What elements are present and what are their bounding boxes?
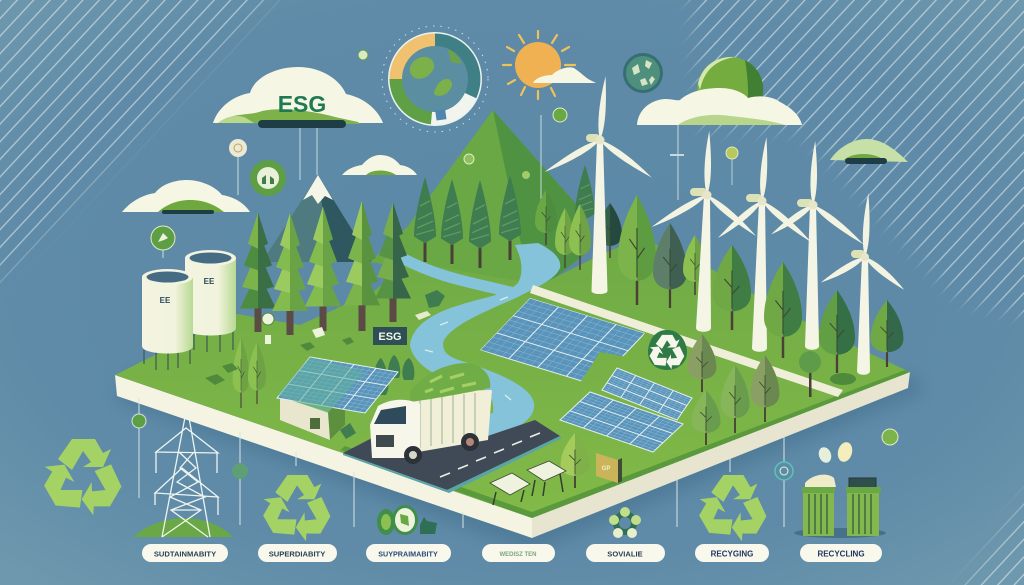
- globe infographic: [382, 26, 488, 132]
- wind turbines: [543, 76, 906, 375]
- label pill 2: [258, 544, 337, 562]
- solar field: large array: [480, 298, 645, 385]
- label pill 4: WEDISZ TEN: [500, 552, 536, 558]
- storage tank back: [185, 250, 236, 352]
- badge group: [377, 505, 437, 535]
- recycle icon right: [692, 475, 773, 546]
- turbine 2: [650, 131, 758, 332]
- turbine 4: [769, 141, 866, 350]
- round tree: [799, 351, 821, 397]
- platform side right: [532, 372, 910, 538]
- storage tank back: EE: [204, 277, 215, 286]
- turbine 5: [819, 193, 906, 375]
- small five-node recycle icon: [609, 507, 641, 538]
- sun: [503, 31, 596, 99]
- label pill 4: [482, 544, 555, 562]
- turbine 1: [543, 76, 654, 294]
- small trees and shrubs near house: [205, 290, 445, 408]
- dump body: [410, 390, 492, 452]
- solar field: front lower array: [560, 392, 683, 452]
- label pill 6: [695, 544, 769, 562]
- picnic solar tables: [490, 461, 566, 505]
- floating icons: [151, 50, 738, 258]
- recycle icon large: [36, 439, 128, 520]
- platform side left: [115, 375, 532, 538]
- house solar roof: [277, 357, 398, 413]
- label pill 3: [366, 544, 451, 562]
- green hemisphere: [697, 57, 763, 123]
- pins along the platform edge: [139, 398, 784, 528]
- label pill 3: SUYPRAIMABITY: [378, 550, 438, 558]
- gold sign: [596, 453, 622, 483]
- cloud: small middle: [342, 155, 417, 175]
- storage tank front: [142, 269, 193, 370]
- patch of dark ground: [830, 373, 856, 385]
- truck: [370, 363, 492, 464]
- river-side tiny tree: [561, 433, 589, 488]
- small solar house: [277, 357, 398, 440]
- bin left: [802, 475, 836, 536]
- bin right: [846, 478, 881, 536]
- cloud: left: [122, 180, 250, 214]
- recycle icon medium: [256, 475, 337, 546]
- mountain: green: [370, 110, 590, 290]
- label pill 5: SOVIALIE: [607, 550, 643, 558]
- ESG title: ESG: [278, 91, 326, 117]
- solar field: back lower array: [602, 368, 692, 420]
- label pill 2: SUPERDIABITY: [269, 550, 325, 558]
- grass surface: [115, 238, 910, 518]
- platform: [115, 238, 910, 538]
- turbine 3: [716, 137, 813, 352]
- tall pines on the hill: [414, 165, 595, 268]
- transmission tower: [133, 412, 233, 537]
- river: [402, 243, 560, 447]
- ESG sign: ESG: [378, 331, 402, 343]
- mountain: snow peak: [262, 175, 372, 262]
- green load: [410, 363, 490, 402]
- background trees right of river: [535, 190, 707, 308]
- pin badges: [132, 414, 898, 480]
- cloud: right: [637, 88, 802, 125]
- sun cloud: [533, 67, 596, 83]
- storage tank front: EE: [160, 296, 171, 305]
- label pill 5: [586, 544, 665, 562]
- label pill 6: RECYGING: [711, 550, 753, 558]
- left fir trees: [240, 200, 411, 335]
- ESG sign: [373, 327, 407, 345]
- small globe icon: [623, 53, 663, 93]
- recycling bins: [794, 475, 886, 538]
- darker grass strip: [340, 370, 910, 518]
- gold sign: GP: [602, 466, 610, 472]
- platform shadow: [115, 370, 925, 552]
- truck wheels: [404, 446, 422, 464]
- cloud: ESG: [213, 67, 383, 128]
- cab: [370, 400, 420, 458]
- cream path strip: [530, 285, 843, 397]
- recycling badge in field: [646, 330, 687, 371]
- label pill 1: [142, 544, 228, 562]
- cloud: far right: [830, 139, 908, 164]
- label pill 7: [800, 544, 882, 562]
- road: [343, 420, 562, 493]
- label pill 7: RECYCLING: [817, 550, 865, 558]
- broadleaf trees right: [688, 245, 903, 445]
- label pill 1: SUDTAINMABITY: [154, 550, 216, 558]
